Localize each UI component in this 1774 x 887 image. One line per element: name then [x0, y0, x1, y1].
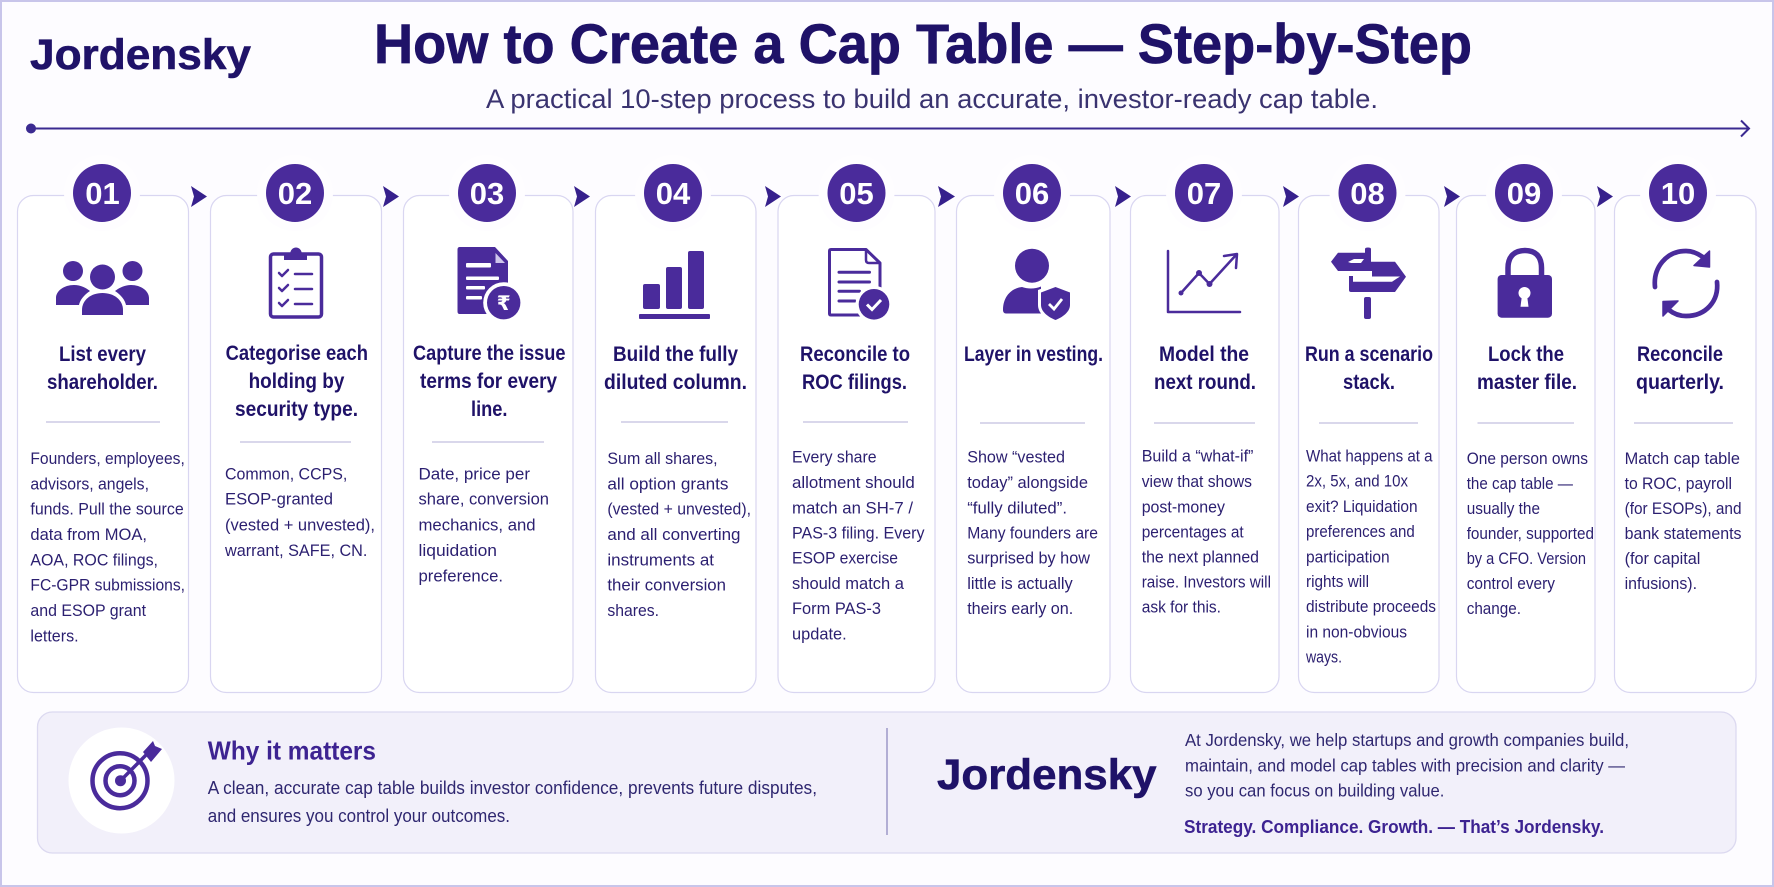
heading: Lock the [1488, 343, 1564, 366]
body text: today” alongside [967, 473, 1088, 492]
body text: exit? Liquidation [1306, 497, 1418, 516]
body text: by a CFO. Version [1467, 549, 1586, 568]
heading [47, 343, 158, 394]
body text [1625, 449, 1742, 593]
subtitle: A practical 10-step process to build an accurate, investor-ready cap table. [486, 84, 1378, 114]
arrow: 09 to 10 [1597, 186, 1613, 207]
panel: step 09 [1456, 155, 1595, 692]
body text: infusions). [1625, 574, 1697, 593]
body text: Sum all shares, [607, 449, 718, 468]
body text [30, 449, 185, 645]
arrow: 05 to 06 [938, 186, 955, 207]
heading: stack. [1343, 371, 1395, 394]
icon: document with rupee coin [458, 247, 524, 323]
heading: Model the [1159, 343, 1249, 366]
heading: master file. [1477, 371, 1577, 394]
panel: step 01 [18, 155, 188, 692]
body text: share, conversion [418, 490, 549, 509]
arrow: 03 to 04 [574, 186, 590, 207]
body text: update. [792, 624, 847, 643]
heading: List every [59, 343, 146, 366]
body text: Many founders are [967, 523, 1098, 542]
icon: people group [56, 261, 149, 315]
heading: next round. [1154, 371, 1256, 394]
heading [604, 343, 747, 394]
logo: Jordensky: Jordensky [937, 751, 1157, 799]
body text: (vested + unvested), [225, 515, 375, 534]
body text: Match cap table [1625, 449, 1740, 468]
body text: liquidation [418, 541, 497, 560]
body text: founder, supported [1467, 524, 1594, 543]
body text: Show “vested [967, 448, 1065, 467]
number badge 06 [1003, 164, 1061, 222]
icon: bar chart [639, 251, 710, 319]
arrow: 08 to 09 [1444, 186, 1460, 207]
number badge 10: 10 [1661, 176, 1695, 211]
body text: (for capital [1625, 549, 1700, 568]
text: about Jordensky: At Jordensky, we help startups and growth companies build, [1185, 730, 1629, 750]
body text: the cap table — [1467, 474, 1573, 493]
body text: 2x, 5x, and 10x [1306, 472, 1409, 491]
body text: Founders, employees, [30, 449, 185, 468]
body text: (vested + unvested), [607, 500, 751, 519]
panel: step 10 [1614, 155, 1756, 692]
logo: Jordensky: Jordensky [30, 31, 251, 79]
body text: Build a “what-if” [1142, 447, 1253, 466]
icon: refresh arrows [1655, 251, 1717, 316]
body text: ask for this. [1142, 597, 1221, 616]
heading [1477, 343, 1577, 394]
tagline: Strategy. Compliance. Growth. — That’s Jordensky. [1184, 816, 1604, 837]
panel: step 06 [956, 155, 1110, 692]
number badge 07: 07 [1187, 176, 1221, 211]
body text: Common, CCPS, [225, 464, 347, 483]
body text [1305, 447, 1436, 666]
heading: Layer in vesting. [964, 343, 1103, 366]
number badge 10 [1649, 164, 1707, 222]
body text: funds. Pull the source [30, 500, 184, 519]
body text: What happens at a [1306, 447, 1433, 466]
heading: Reconcile [1637, 343, 1723, 366]
body text: raise. Investors will [1142, 572, 1271, 591]
body text: One person owns [1467, 449, 1588, 468]
text: why it matters [208, 778, 817, 826]
body text [418, 464, 549, 586]
arrow: 06 to 07 [1115, 186, 1131, 207]
number badge 02 [266, 164, 324, 222]
body text: instruments at [607, 550, 714, 569]
number badge 02: 02 [278, 176, 312, 211]
body text: AOA, ROC filings, [30, 550, 158, 569]
body text: “fully diluted”. [967, 498, 1067, 517]
title: How to Create a Cap Table — Step-by-Step [374, 12, 1472, 75]
body text: in non-obvious [1306, 622, 1407, 641]
body text: usually the [1467, 499, 1540, 518]
body text: data from MOA, [30, 525, 147, 544]
number badge 01 [73, 164, 131, 222]
icon: padlock [1498, 250, 1552, 318]
heading: terms for every [420, 370, 557, 393]
heading: holding by [249, 370, 345, 393]
heading [226, 342, 368, 421]
body text: PAS-3 filing. Every [792, 523, 925, 542]
heading: security type. [235, 398, 358, 421]
heading [1305, 343, 1433, 394]
body text: and ESOP grant [30, 601, 146, 620]
heading: shareholder. [47, 371, 158, 394]
text: why it matters: and ensures you control your outcomes. [208, 806, 510, 826]
body text: distribute proceeds [1306, 597, 1436, 616]
body text [1142, 447, 1271, 616]
arrow: 04 to 05 [765, 186, 781, 207]
body text: advisors, angels, [30, 474, 149, 493]
heading [1636, 343, 1724, 394]
text: about Jordensky: so you can focus on building value. [1185, 781, 1444, 801]
body text: match an SH-7 / [792, 498, 913, 517]
number badge 08 [1338, 164, 1396, 222]
body text: little is actually [967, 574, 1073, 593]
body text [224, 464, 375, 560]
body text [967, 448, 1098, 618]
body text: Form PAS-3 [792, 599, 881, 618]
body text: bank statements [1625, 524, 1742, 543]
number badge 07 [1175, 164, 1233, 222]
icon: checklist clipboard [270, 248, 322, 317]
body text: allotment should [792, 473, 915, 492]
panel: step 08 [1298, 155, 1439, 692]
icon: growth line chart [1168, 251, 1240, 312]
heading: Run a scenario [1305, 343, 1433, 366]
body text: mechanics, and [418, 515, 536, 534]
body text: view that shows [1142, 472, 1252, 491]
heading: why it matters: Why it matters [208, 735, 376, 765]
body text: to ROC, payroll [1625, 474, 1732, 493]
heading [800, 343, 910, 394]
arrow: 02 to 03 [383, 186, 399, 207]
number badge 05 [828, 164, 886, 222]
body text: preferences and [1306, 522, 1415, 541]
body text: ESOP-granted [225, 490, 333, 509]
body text: rights will [1306, 572, 1369, 591]
body text: preference. [418, 567, 503, 586]
body text: theirs early on. [967, 599, 1073, 618]
body text: control every [1467, 574, 1556, 593]
icon: person with shield [1003, 249, 1073, 323]
number badge 03 [458, 164, 516, 222]
panel: step 03 [404, 155, 573, 692]
panel: step 04 [596, 155, 756, 692]
number badge 09 [1495, 164, 1553, 222]
body text: (for ESOPs), and [1625, 499, 1742, 518]
heading: Capture the issue [413, 342, 566, 365]
text: about Jordensky [1185, 730, 1629, 801]
body text: participation [1306, 547, 1390, 566]
body text: letters. [30, 626, 79, 645]
number badge 09: 09 [1507, 176, 1541, 211]
heading: diluted column. [604, 371, 747, 394]
body text: all option grants [607, 474, 728, 493]
panel: step 07 [1130, 155, 1279, 692]
number badge 04: 04 [656, 176, 691, 211]
body text [607, 449, 751, 620]
icon: target with arrow [68, 728, 174, 834]
panel: step 02 [210, 155, 382, 692]
body text: should match a [792, 574, 905, 593]
heading: Categorise each [226, 342, 368, 365]
text: about Jordensky: maintain, and model cap tables with precision and clarity — [1185, 756, 1625, 776]
body text [1467, 449, 1594, 618]
number badge 04 [644, 164, 702, 222]
icon: signpost [1331, 248, 1406, 319]
body text: post-money [1142, 497, 1226, 516]
number badge 01: 01 [85, 176, 120, 211]
number badge 08: 08 [1350, 176, 1385, 211]
heading: line. [471, 398, 508, 421]
number badge 06: 06 [1015, 176, 1049, 211]
heading: ROC filings. [802, 371, 907, 394]
body text: change. [1467, 599, 1521, 618]
text: why it matters: A clean, accurate cap table builds investor confidence, prevents future disputes, [208, 778, 817, 798]
body text: FC-GPR submissions, [30, 576, 185, 595]
body text: ESOP exercise [792, 549, 898, 568]
arrow: 01 to 02 [191, 186, 207, 207]
body text: shares. [607, 601, 659, 620]
arrow: 07 to 08 [1283, 186, 1299, 207]
panel: bottom banner [38, 712, 1736, 853]
body text: percentages at [1142, 522, 1244, 541]
body text: surprised by how [967, 549, 1091, 568]
body text: and all converting [607, 525, 740, 544]
body text: Date, price per [418, 464, 530, 483]
body text: Every share [792, 448, 877, 467]
body text: the next planned [1142, 547, 1259, 566]
heading [1154, 343, 1256, 394]
number badge 03: 03 [470, 176, 504, 211]
heading: Reconcile to [800, 343, 910, 366]
body text: ways. [1305, 647, 1342, 666]
body text: warrant, SAFE, CN. [224, 541, 367, 560]
timeline arrow [26, 120, 1749, 136]
panel: step 05 [778, 155, 935, 692]
heading [413, 342, 566, 421]
body text [792, 448, 925, 643]
heading: Build the fully [613, 343, 738, 366]
icon: document with rupee coin: ₹ [497, 291, 511, 315]
heading: quarterly. [1636, 371, 1724, 394]
icon: document with check [830, 250, 892, 323]
body text: their conversion [607, 576, 726, 595]
number badge 05: 05 [839, 176, 874, 211]
